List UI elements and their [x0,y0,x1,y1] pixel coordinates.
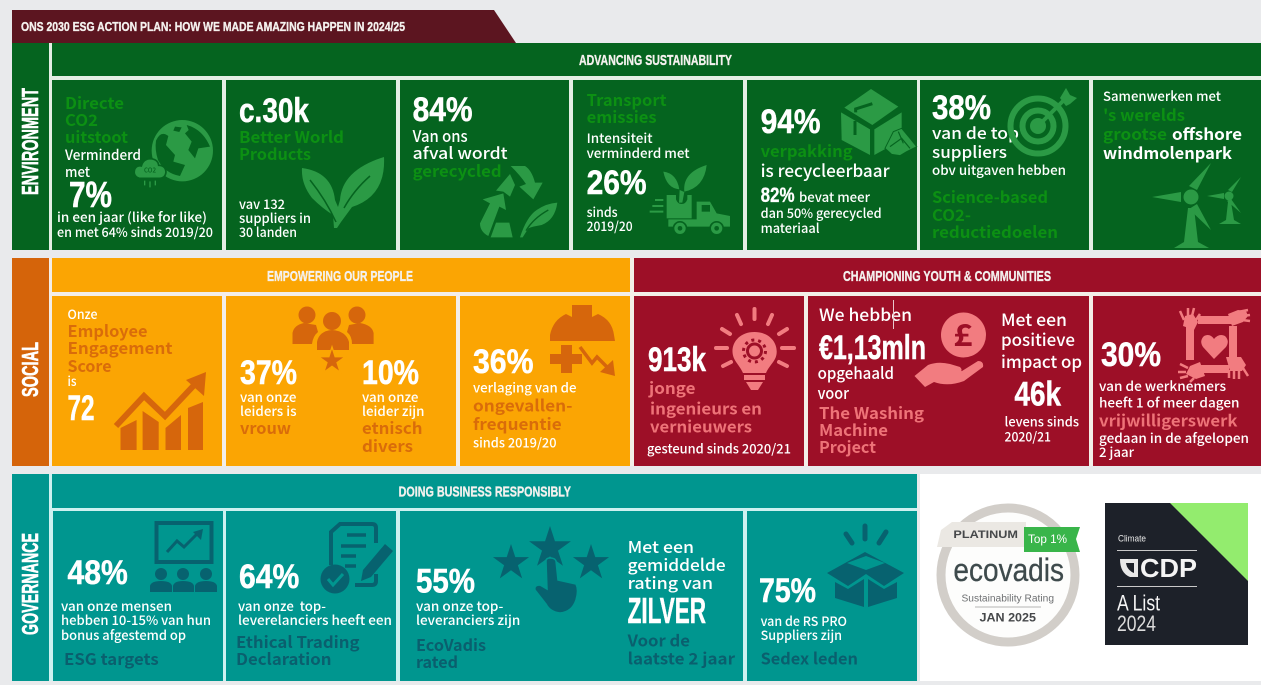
card: ethical trading declaration: Ethical Trading [236,629,360,653]
icon: delivery truck with plant [650,165,730,236]
card: transport emissions: 2019/20 [587,216,633,235]
card: leaders diversity: leider zijn [362,401,424,420]
card: volunteering: van de werknemers [1099,376,1226,395]
icon: three stars with pointing hand [493,526,609,613]
card: better world products: Better World [239,124,344,148]
CDP A List badge: CDP [1140,553,1197,583]
card: science-based targets: van de top [932,120,1019,144]
card: washing machine project: 46k [1014,376,1061,414]
card: offshore wind farm: offshore [1172,121,1242,145]
card: better world products: 30 landen [239,222,297,241]
card: transport emissions: sinds [587,202,618,221]
card: volunteering: 2 jaar [1099,442,1135,461]
card: recyclable packaging: verpakking [761,138,853,162]
card: washing machine project: levens sinds [1004,412,1079,431]
card: young engineers: 913k [648,341,706,379]
card: volunteering: vrijwilligerswerk [1099,408,1238,432]
card: Sedex members: Sedex leden [761,645,858,669]
card: better world products [226,80,396,250]
card: EcoVadis rated: 55% [416,563,475,601]
card: science-based targets: reductiedoelen [932,219,1058,243]
card: leaders diversity: leiders is [240,401,296,420]
card: accident frequency: frequentie [473,411,562,435]
card: better world products: vav 132 [239,194,285,213]
card: washing machine project: positieve [1001,326,1075,351]
card: washing machine project: Machine [819,417,888,441]
card: direct CO2 emissions: CO2 [65,107,98,131]
card: employee engagement [52,296,222,466]
ecovadis platinum badge: PLATINUM [953,529,1018,541]
card: ethical trading declaration [226,511,396,681]
card: washing machine project: The Washing [819,400,924,424]
icon: package box [841,89,917,156]
title banner: ONS 2030 ESG ACTION PLAN: HOW WE MADE AMAZING HAPPEN IN 2024/25 [21,19,405,34]
card: EcoVadis rated: EcoVadis [416,632,486,656]
icon: globe with CO2 cloud [134,120,213,187]
card: direct CO2 emissions: in een jaar (like for like) [57,207,207,226]
panel: governance [12,474,917,681]
card: recyclable packaging: bevat meer [799,187,871,206]
ecovadis platinum badge: Sustainability Rating [962,594,1054,605]
card: young engineers: vernieuwers [650,414,752,438]
card: washing machine project: 2020/21 [1004,427,1051,446]
CDP A List badge [1105,503,1248,645]
card: young engineers [634,296,804,466]
card: science-based targets: CO2- [932,202,971,226]
card: bonus ESG targets: 48% [68,554,128,592]
card: ethical trading declaration: Declaration [236,646,332,670]
card: recyclable packaging: 94% [761,103,821,141]
ecovadis platinum badge: ecovadis [953,552,1064,588]
title banner [12,10,516,43]
heading: championing youth and communities [634,258,1261,292]
card: washing machine project: impact op [1001,348,1082,373]
card: EcoVadis rated: rating van [628,570,713,594]
card: accident frequency: 36% [473,343,534,381]
card: washing machine project: €1,13mln [819,329,926,367]
card: Sedex members: Suppliers zijn [761,625,842,644]
card: EcoVadis rated [400,511,743,681]
card: volunteering [1093,296,1261,466]
card: better world products: Products [239,141,311,165]
card: washing machine project: Project [819,434,876,458]
heading: advancing sustainability [52,43,1261,76]
icon: globe with CO2 cloud: CO2 [144,165,156,175]
card: young engineers: gesteund sinds 2020/21 [647,438,791,457]
card: science-based targets [920,80,1089,250]
card: offshore wind farm [1093,80,1261,250]
card: recyclable packaging: 82% [761,184,795,207]
card: bonus ESG targets: van onze mensen [61,596,172,615]
card: direct CO2 emissions: en met 64% sinds 2019/20 [57,222,213,241]
label: environment: ENVIRONMENT [17,88,43,195]
card: accident frequency: sinds 2019/20 [473,432,556,451]
label: environment [12,43,49,250]
label: social [12,258,49,466]
card: better world products: c.30k [239,92,309,130]
icon: recycling arrows with leaf [480,166,557,237]
card: washing machine project: We hebben [819,301,912,326]
CDP A List badge: A List [1117,591,1160,616]
card: bonus ESG targets: ESG targets [64,646,159,670]
card: leaders diversity: 37% [240,354,297,392]
card: recyclable packaging: is recycleerbaar [761,157,890,182]
card: offshore wind farm: Samenwerken met [1103,86,1221,105]
card: employee engagement: Engagement [68,335,173,359]
card: washing machine project [808,296,1089,466]
card: transport emissions: emissies [587,104,657,128]
CDP A List badge: 2024 [1117,611,1156,636]
card: recyclable packaging: materiaal [761,218,820,237]
card: employee engagement: Score [68,353,112,377]
card: employee engagement: is [68,371,76,390]
card: Sedex members [747,511,917,681]
card: transport emissions: 26% [587,164,647,202]
ecovadis platinum badge: JAN 2025 [980,611,1036,625]
icon: rising bar chart [116,372,206,450]
card: EcoVadis rated: rated [416,649,458,673]
icon: hand holding pound coin [914,311,986,387]
card: direct CO2 emissions: 7% [69,174,112,215]
card: bonus ESG targets: hebben 10-15% van hun [61,610,211,629]
card: accident frequency: ongevallen- [473,393,573,417]
card: direct CO2 emissions: met [65,162,90,182]
panel: environment [12,43,1261,250]
card: Sedex members: 75% [759,572,816,610]
card: transport emissions [573,80,743,250]
card: recycled waste [400,80,569,250]
panel: certifications [920,474,1261,681]
icon: hand holding pound coin: £ [953,311,973,355]
icon: open box [827,526,904,607]
icon: light bulb with gear [716,309,794,390]
card: leaders diversity: 10% [362,354,419,392]
icon: team with star [292,306,374,372]
card: volunteering: 30% [1101,336,1161,374]
card: offshore wind farm: 's werelds [1103,102,1185,126]
panel: social [12,258,1261,466]
card: Sedex members: van de RS PRO [761,611,847,630]
card: accident frequency [460,296,630,466]
ecovadis platinum badge [937,508,1080,642]
card: leaders diversity [226,296,456,466]
icon: target with arrow [1010,88,1077,154]
icon: wind turbines [1152,163,1241,248]
CDP A List badge: Climate [1118,534,1146,544]
card: leaders diversity: etnisch [362,415,422,439]
card: science-based targets: Science-based [932,184,1048,208]
icon: helmet, cross and down arrow [550,305,615,376]
card: volunteering: heeft 1 of meer dagen [1099,393,1240,412]
heading: doing business responsibly [52,474,917,508]
heading: advancing sustainability: ADVANCING SUSTAINABILITY [579,52,732,69]
card: leaders diversity: divers [362,433,413,457]
card: transport emissions: Transport [587,87,667,111]
card: leaders diversity: van onze [240,387,296,406]
card: ethical trading declaration: van onze top- [238,596,326,615]
card: recyclable packaging: dan 50% gerecycled [761,203,882,222]
card: EcoVadis rated: gemiddelde [628,552,726,576]
heading: championing youth and communities: CHAMPIONING YOUTH & COMMUNITIES [843,268,1051,285]
card: recyclable packaging [747,80,917,250]
icon: document with pen and check [320,524,393,594]
card: direct CO2 emissions: uitstoot [65,124,128,148]
card: direct CO2 emissions: Directe [65,90,124,114]
card: EcoVadis rated: leveranciers zijn [416,610,520,629]
icon: presentation with audience [150,523,217,592]
label: social: SOCIAL [17,342,43,397]
card: young engineers: jonge [648,375,696,399]
card: recycled waste: afval wordt [413,140,508,164]
card: direct CO2 emissions [52,80,222,250]
card: recycled waste: 84% [413,91,473,129]
card: washing machine project: opgehaald [818,360,894,384]
card: bonus ESG targets [53,511,223,681]
card: accident frequency: verlaging van de [473,378,576,397]
card: offshore wind farm: windmolenpark [1103,140,1232,164]
card: washing machine project: Met een [1001,306,1067,331]
card: volunteering: gedaan in de afgelopen [1099,428,1249,447]
heading: doing business responsibly: DOING BUSINESS RESPONSIBLY [399,484,571,501]
card: EcoVadis rated: van onze top- [416,596,504,615]
heading: empowering our people: EMPOWERING OUR PEOPLE [267,268,413,285]
card: EcoVadis rated: Met een [628,534,694,558]
label: governance: GOVERNANCE [17,533,43,635]
card: young engineers: ingenieurs en [650,395,762,419]
card: science-based targets: obv uitgaven hebben [932,160,1066,179]
heading: empowering our people [52,258,630,292]
icon: plant leaves [302,157,384,228]
card: employee engagement: Onze [68,304,98,323]
card: transport emissions: Intensiteit [587,128,653,147]
card: recycled waste: Van ons [412,123,468,147]
card: science-based targets: suppliers [932,139,1007,163]
card: ethical trading declaration: 64% [239,558,299,596]
card: direct CO2 emissions: Verminderd [64,145,141,165]
card: employee engagement: Employee [68,318,148,342]
card: bonus ESG targets: bonus afgestemd op [61,625,186,644]
card: leaders diversity: vrouw [240,415,291,439]
icon: four hands around heart [1178,308,1250,382]
card: EcoVadis rated: Voor de [627,628,690,652]
card: ethical trading declaration: leverelanciers heeft een [238,610,392,629]
card: washing machine project: voor [818,380,849,404]
ecovadis platinum badge: Top 1% [1028,532,1067,546]
card: EcoVadis rated: ZILVER [628,590,706,631]
card: offshore wind farm: grootse [1103,121,1167,145]
card: employee engagement: 72 [68,389,94,428]
card: science-based targets: 38% [932,89,991,127]
label: governance [12,474,49,681]
card: transport emissions: verminderd met [587,143,690,162]
card: leaders diversity: van onze [362,387,418,406]
card: EcoVadis rated: laatste 2 jaar [628,645,735,669]
card: better world products: suppliers in [239,208,311,227]
card: recycled waste: gerecycled [413,158,502,182]
